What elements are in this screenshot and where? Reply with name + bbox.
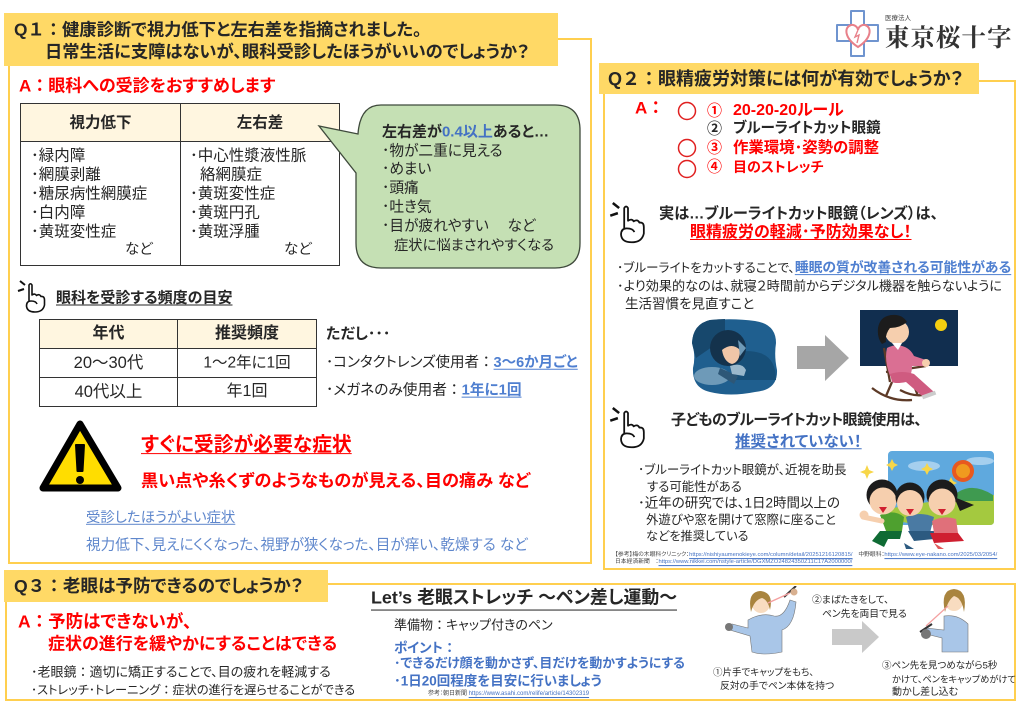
table: recommended frequency: 40代以上: [75, 383, 142, 401]
text: step 1: 反対の手でペン本体を持つ: [720, 681, 834, 692]
text: step 2: ペン先を両目で見る: [822, 609, 907, 620]
table: vision loss and anisometropia: ･緑内障: [31, 147, 85, 164]
logo: 東京桜十字: [885, 25, 1012, 52]
table: vision loss and anisometropia: 視力低下: [69, 114, 132, 131]
text: presbyopia measures: [31, 664, 355, 697]
text: presbyopia measures: ･ストレッチ･トレーニング：症状の進行を遅らせることができる: [31, 683, 355, 697]
text: exceptions: ただし･･･: [326, 326, 390, 342]
illustration: step 1 person holding pen up: [725, 586, 798, 654]
text: preparation and points: 準備物：キャップ付きのペン: [394, 618, 553, 632]
text: blue-light explanation: ･ブルーライトをカットすることで、睡眠の質が改善される可能性がある: [617, 260, 1011, 275]
answer: Q2 choices: ③: [707, 140, 722, 156]
answer: Q2 choices: [635, 98, 881, 178]
text: step 3: ③ペン先を見つめながら5秒: [882, 660, 997, 671]
text: exceptions: [326, 326, 578, 399]
callout: symptoms of anisometropia: 症状に悩まされやすくなる: [394, 238, 554, 254]
callout: symptoms of anisometropia: ･吐き気: [382, 200, 432, 216]
answer: Q2 choices: 作業環境･姿勢の調整: [733, 139, 879, 156]
table: vision loss and anisometropia: など: [125, 242, 153, 258]
text: preparation and points: ･できるだけ顔を動かさず、目だけを動かすようにする: [394, 656, 685, 671]
answer: Q1: A：眼科への受診をおすすめします: [19, 76, 275, 96]
text: step 2: [812, 594, 907, 620]
table: vision loss and anisometropia: ･黄斑浮腫: [190, 223, 260, 240]
answer: Q2 choices: ②: [707, 120, 722, 138]
table: vision loss and anisometropia: ･黄斑円孔: [190, 204, 260, 221]
text: presbyopia measures: ･老眼鏡：適切に矯正することで、目の疲れを軽減する: [31, 664, 331, 680]
logo: [836, 10, 1012, 57]
text: children recommendation: 子どものブルーライトカット眼鏡使用は、: [671, 412, 921, 428]
panel: Q3: [5, 583, 1016, 701]
answer: Q2 choices: 目のストレッチ: [733, 159, 824, 175]
text: blue-light explanation: [617, 260, 1012, 311]
heading: visit frequency: 眼科を受診する頻度の目安: [56, 290, 232, 306]
panel: Q2: [603, 80, 1016, 570]
heading: Q2 question: [599, 63, 979, 94]
table: recommended frequency: 年1回: [227, 383, 267, 400]
text: step 3: [882, 660, 1016, 698]
text: references: [615, 551, 998, 566]
table: vision loss and anisometropia: ･糖尿病性網膜症: [31, 185, 147, 202]
table: vision loss and anisometropia: [20, 103, 340, 266]
answer: Q2 choices: A：: [635, 98, 664, 118]
heading: Q3 question: Q３：老眼は予防できるのでしょうか？: [14, 576, 303, 596]
callout: symptoms of anisometropia: ･頭痛: [382, 181, 419, 197]
table: vision loss and anisometropia: など: [284, 242, 312, 258]
answer: Q3: [18, 611, 337, 654]
heading: Q1 question: Q１：健康診断で視力低下と左右差を指摘されました。: [14, 19, 422, 39]
illustration: woman relaxing in rocking chair: [860, 310, 958, 402]
text: blue-light explanation: ･より効果的なのは、就寝２時間前からデジタル機器を触らないように: [617, 278, 1002, 293]
heading: Q3 question: [4, 570, 328, 602]
heading: Q2 question: Q２：眼精疲労対策には何が有効でしょうか？: [608, 69, 963, 89]
icon: pointing hand: [610, 407, 645, 448]
table: recommended frequency: 年代: [92, 325, 124, 342]
table: recommended frequency: [39, 319, 317, 407]
icon: pointing hand: [18, 280, 46, 313]
callout: symptoms of anisometropia: ･物が二重に見える: [382, 144, 503, 160]
answer: Q2 choices: ①: [707, 102, 722, 120]
text: preparation and points: [394, 618, 685, 698]
table: recommended frequency: 1～2年に1回: [203, 354, 291, 371]
icon: pointing hand: [610, 202, 645, 244]
text: step 1: [713, 667, 834, 692]
text: urgent symptoms: [141, 434, 531, 490]
table: vision loss and anisometropia: 左右差: [237, 114, 283, 131]
text: references: 【参考】梅の木眼科クリニック：https://nishiyaumenokieye.com/column/detail/20251216120815/ 中野眼科：https://www.eye-nakano.com/2025/03/2054/: [615, 552, 997, 558]
text: step 3: 動かし差し込む: [892, 687, 958, 698]
illustration: children running outdoors: [860, 451, 994, 549]
text: preparation and points: 参考：朝日新聞 https://www.asahi.com/relife/article/14302319: [428, 691, 589, 697]
heading: Q1 question: [4, 13, 558, 66]
text: blue-light lens finding: [659, 205, 938, 241]
table: vision loss and anisometropia: 絡網膜症: [200, 166, 262, 183]
illustration: person unable to sleep: [692, 319, 778, 394]
text: children details: などを推奨している: [646, 529, 748, 543]
text: urgent symptoms: すぐに受診が必要な症状: [141, 434, 352, 456]
text: step 3: かけて、ペンをキャップめがけて: [892, 674, 1016, 684]
text: preparation and points: ポイント：: [394, 640, 456, 655]
arrow: gray: [832, 621, 879, 653]
text: recommended-visit symptoms: 視力低下、見えにくくなった、視野が狭くなった、目が痒い、乾燥する など: [86, 538, 528, 554]
text: exceptions: ･コンタクトレンズ使用者：3～6か月ごと: [326, 355, 578, 371]
text: blue-light lens finding: 実は…ブルーライトカット眼鏡（レンズ）は、: [659, 205, 938, 222]
text: preparation and points: ･1日20回程度を目安に行いましょう: [394, 673, 602, 688]
text: blue-light lens finding: 眼精疲労の軽減･予防効果なし！: [690, 224, 912, 241]
answer: Q3: 症状の進行を緩やかにすることはできる: [48, 634, 337, 654]
text: children details: 外遊びや窓を開けて窓際に座ること: [646, 513, 836, 527]
callout: symptoms of anisometropia: [318, 104, 581, 269]
table: vision loss and anisometropia: ･中心性漿液性脈: [190, 147, 306, 164]
text: children recommendation: 推奨されていない！: [735, 433, 862, 450]
table: vision loss and anisometropia: ･網膜剥離: [31, 166, 101, 183]
text: children details: ･近年の研究では、1日2時間以上の: [638, 495, 840, 510]
answer: Q2 choices: 20-20-20ルール: [733, 102, 844, 119]
text: exceptions: ･メガネのみ使用者：1年に1回: [326, 383, 522, 399]
text: children details: [638, 463, 846, 543]
text: step 1: ①片手でキャップをもち、: [713, 667, 814, 678]
logo: 医療法人: [885, 15, 911, 22]
answer: Q2 choices: ブルーライトカット眼鏡: [733, 121, 881, 137]
text: step 2: ②まばたきをして、: [812, 595, 889, 606]
table: recommended frequency: 推奨頻度: [215, 325, 279, 342]
text: urgent symptoms: 黒い点や糸くずのようなものが見える、目の痛み など: [141, 470, 530, 490]
heading: pen stretch exercise: Let’s 老眼ストレッチ ～ペン差し運動～: [371, 588, 677, 608]
table: recommended frequency: 20～30代: [74, 354, 143, 372]
illustration: step 3 person moving pen: [920, 589, 968, 652]
text: recommended-visit symptoms: [86, 510, 528, 554]
answer: Q3: A：予防はできないが、: [18, 611, 192, 631]
callout: symptoms of anisometropia: ･めまい: [382, 162, 431, 178]
callout: symptoms of anisometropia: 左右差が0.4以上あると…: [382, 124, 549, 140]
table: vision loss and anisometropia: ･黄斑変性症: [31, 223, 116, 240]
table: vision loss and anisometropia: ･黄斑変性症: [190, 185, 275, 202]
text: children details: ･ブルーライトカット眼鏡が、近視を助長: [638, 463, 846, 477]
icon: warning triangle: [40, 420, 122, 492]
heading: Q1 question: 日常生活に支障はないが、眼科受診したほうがいいのでしょうか？: [45, 41, 529, 61]
answer: Q2 choices: ④: [707, 158, 722, 176]
panel: Q1: [8, 38, 592, 564]
arrow: gray: [797, 335, 849, 381]
text: children recommendation: [671, 412, 921, 450]
text: references: 日本経済新聞 ：https://www.nikkei.com/nstyle-article/DGXMZO24824350Z11C17A2000000/: [615, 559, 852, 565]
text: blue-light explanation: 生活習慣を見直すこと: [625, 296, 754, 311]
callout: symptoms of anisometropia: ･目が疲れやすい など: [382, 219, 536, 235]
text: children details: する可能性がある: [647, 480, 742, 494]
text: recommended-visit symptoms: 受診したほうがよい症状: [86, 510, 235, 526]
table: vision loss and anisometropia: ･白内障: [31, 204, 85, 221]
